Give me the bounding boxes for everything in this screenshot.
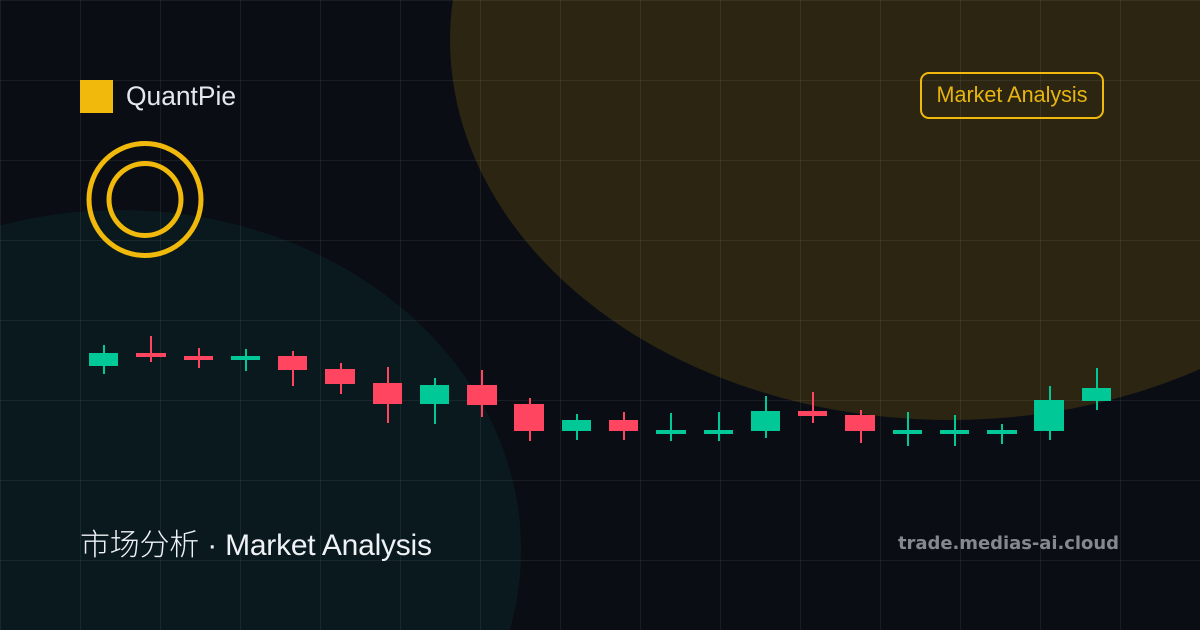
candle 20 up (987, 424, 1017, 444)
background shape: teal ellipse (0, 210, 521, 630)
candle 3 down (184, 348, 213, 368)
logo: gold square (80, 80, 113, 113)
candle 22 up (1082, 368, 1111, 410)
candle 15 up (751, 396, 780, 438)
candle 11 up (562, 414, 591, 440)
candle 6 down (325, 363, 355, 394)
badge: Market Analysis: Market Analysis (936, 82, 1088, 107)
badge: Market Analysis (921, 73, 1103, 118)
candle 16 down (798, 392, 827, 423)
candle 13 up (656, 413, 686, 441)
candle 4 up (231, 349, 260, 371)
candle 17 down (845, 410, 875, 443)
candle 5 down (278, 351, 307, 386)
candle 19 up (940, 415, 969, 446)
candle 12 down (609, 412, 638, 440)
candlestick chart (89, 336, 1111, 446)
brand name: QuantPie (126, 81, 236, 111)
candle 14 up (704, 412, 733, 441)
candle 2 down (136, 336, 166, 362)
candle 21 up (1034, 386, 1064, 440)
title: 市场分析 · Market Analysis (80, 529, 432, 562)
website url: trade.medias-ai.cloud (898, 533, 1119, 554)
icon: concentric rings (89, 144, 201, 256)
candle 10 down (514, 398, 544, 441)
candle 9 down (467, 370, 497, 417)
background shape: gold ellipse (450, 0, 1200, 420)
candle 1 up (89, 345, 118, 374)
candle 7 down (373, 367, 402, 423)
candle 18 up (893, 412, 922, 446)
candle 8 up (420, 378, 449, 424)
